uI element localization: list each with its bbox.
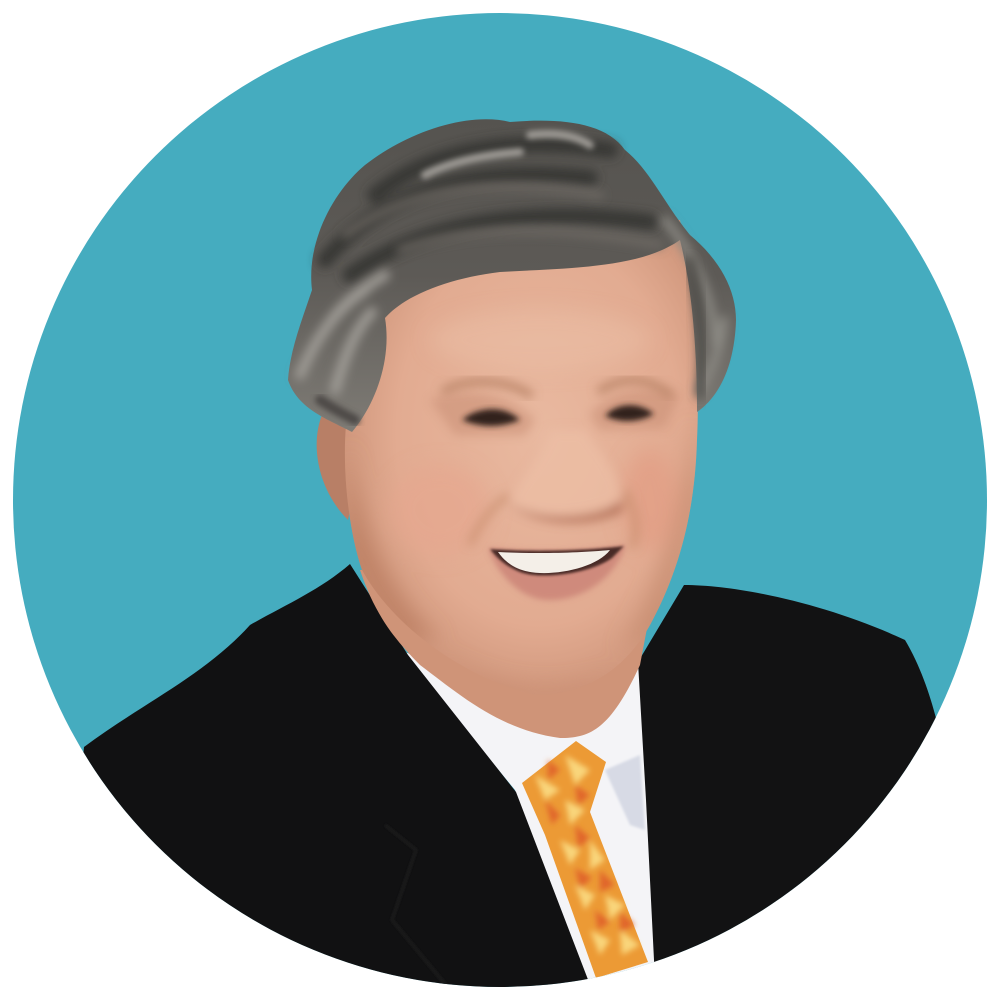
neck bbox=[360, 560, 660, 738]
nose bbox=[468, 452, 640, 547]
lapel seam bbox=[398, 848, 448, 984]
eyes bbox=[430, 380, 680, 435]
face shading bbox=[348, 332, 696, 642]
tie bbox=[522, 741, 648, 978]
shirt bbox=[400, 650, 660, 990]
ear bbox=[316, 416, 350, 520]
jacket bbox=[84, 564, 936, 987]
shirt shadow bbox=[605, 755, 645, 830]
person bbox=[84, 119, 936, 987]
smile bbox=[488, 545, 626, 600]
face bbox=[345, 220, 698, 695]
hair bbox=[288, 119, 736, 432]
